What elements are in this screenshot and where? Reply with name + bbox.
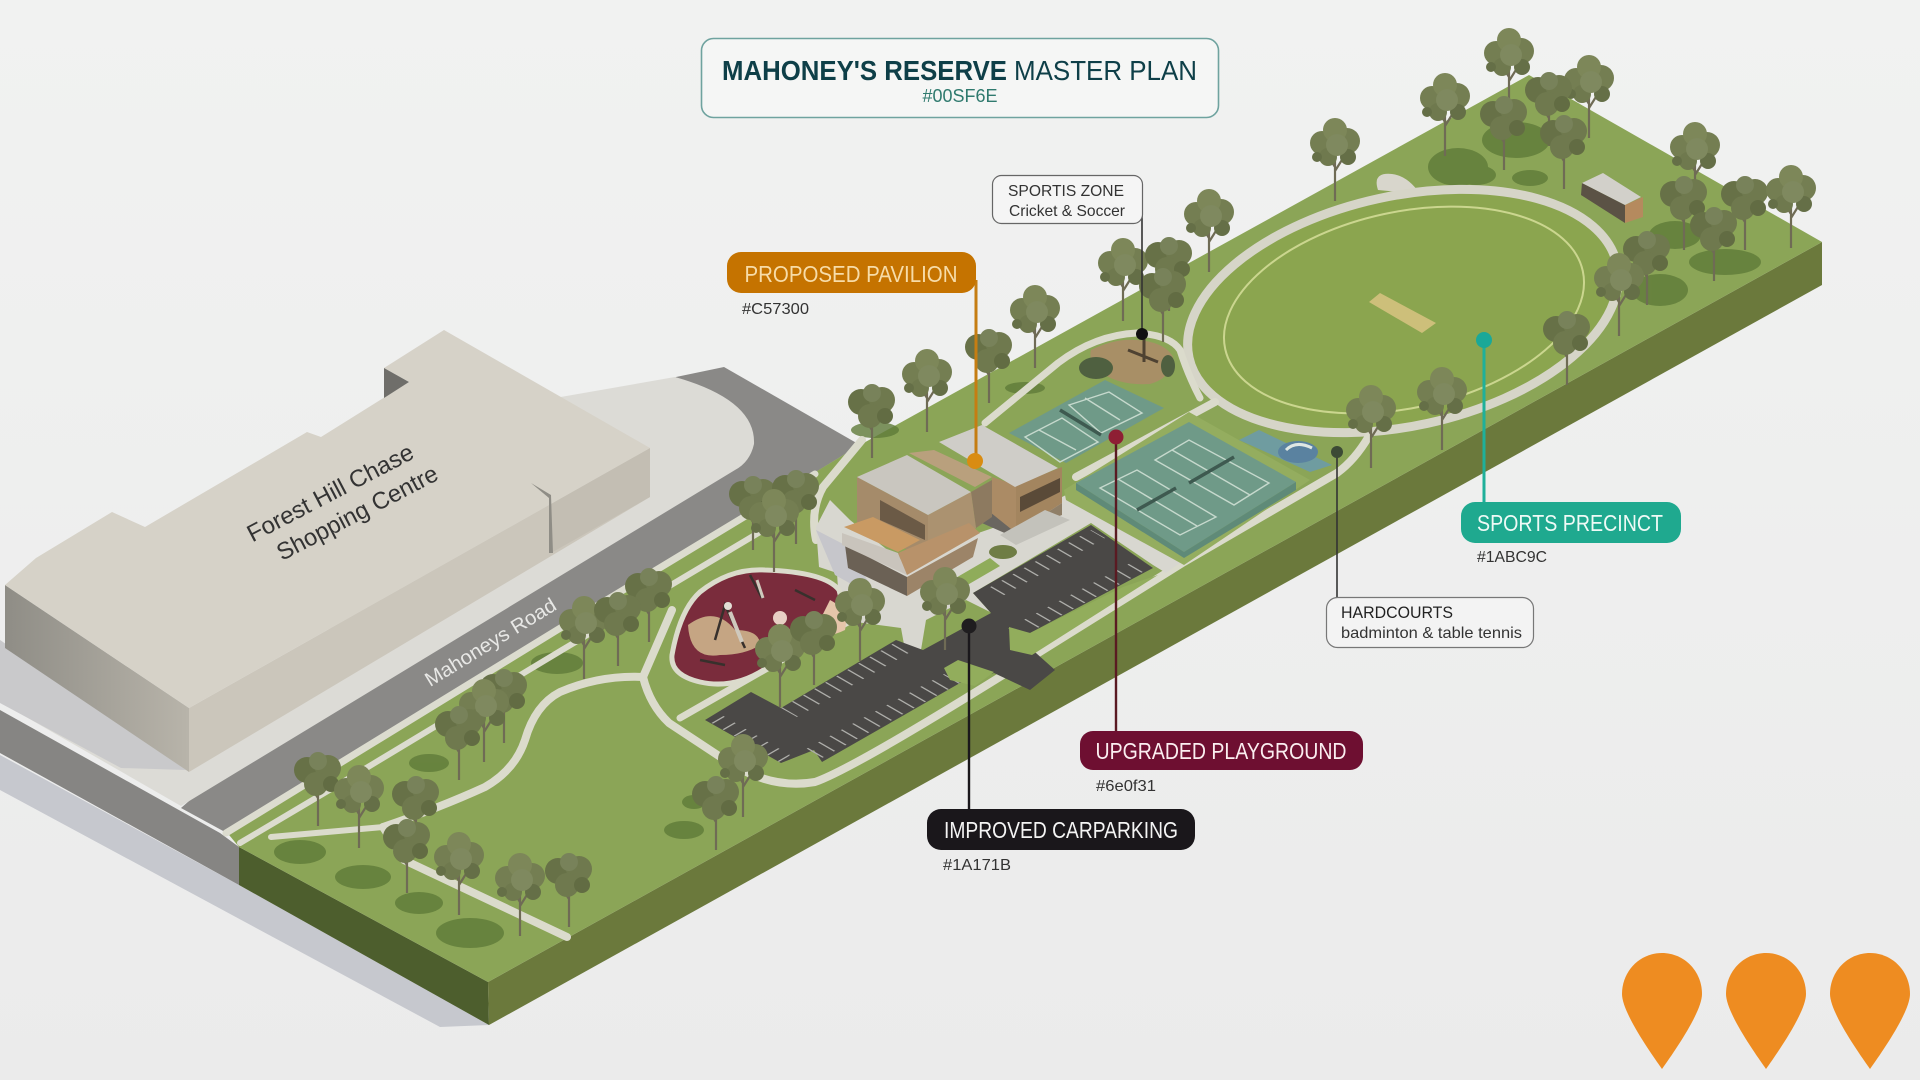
- callout: sports precinct: [1461, 332, 1681, 566]
- proposed pavilion building: [816, 425, 1070, 600]
- callout: sports zone: [992, 176, 1148, 340]
- road: Mahoneys Road: [0, 367, 860, 885]
- callout: improved carparking: [927, 618, 1195, 874]
- callout: hardcourts: [1326, 446, 1534, 648]
- location pins: [1622, 953, 1910, 1069]
- sports shed: [1581, 173, 1643, 223]
- callout: hardcourts: badminton & table tennis: [1341, 625, 1522, 642]
- callout: improved carparking: IMPROVED CARPARKING: [944, 817, 1178, 843]
- label: Forest Hill Chase Shopping Centre: Forest Hill Chase: [243, 439, 418, 548]
- title panel: MASTER PLAN: [1014, 55, 1197, 86]
- hardcourts area: [1239, 430, 1332, 472]
- callout: sports precinct: #1ABC9C: [1477, 549, 1547, 566]
- callout: sports zone: Cricket & Soccer: [1009, 203, 1126, 220]
- callout: proposed pavilion: PROPOSED PAVILION: [744, 261, 958, 287]
- reserve slab: [225, 75, 1822, 1025]
- tree shadows: [274, 122, 1761, 948]
- title panel: MAHONEY'S RESERVE: [722, 55, 1007, 86]
- callout: hardcourts: HARDCOURTS: [1341, 603, 1453, 622]
- pavilion forecourt: [816, 495, 1184, 650]
- playground: [672, 570, 846, 684]
- sports oval: [1165, 152, 1641, 470]
- pavement around shopping centre: [0, 377, 754, 806]
- callout: upgraded playground: [1080, 430, 1363, 795]
- callout: upgraded playground: UPGRADED PLAYGROUND: [1096, 738, 1346, 764]
- label: Forest Hill Chase Shopping Centre: Shopping Centre: [272, 460, 443, 566]
- title panel: #00SF6E: [922, 86, 998, 106]
- callout: sports zone: SPORTIS ZONE: [1008, 183, 1124, 200]
- callout: sports precinct: SPORTS PRECINCT: [1477, 510, 1663, 536]
- ground shadow: [0, 755, 489, 1027]
- footpath strips along road: [226, 474, 815, 843]
- tennis courts: [1009, 380, 1310, 565]
- path network: [271, 333, 1369, 937]
- car parking: [705, 525, 1158, 763]
- callout: proposed pavilion: #C57300: [742, 301, 809, 318]
- callout: proposed pavilion: [727, 252, 983, 469]
- callout: upgraded playground: #6e0f31: [1096, 778, 1156, 795]
- road label: Mahoneys Road: [421, 594, 561, 691]
- building shadow: [0, 640, 186, 770]
- nature play area: [1079, 335, 1175, 384]
- title panel: [702, 38, 1218, 118]
- shopping centre building: [5, 330, 650, 772]
- callout: improved carparking: #1A171B: [943, 857, 1011, 874]
- trees: [294, 28, 1816, 936]
